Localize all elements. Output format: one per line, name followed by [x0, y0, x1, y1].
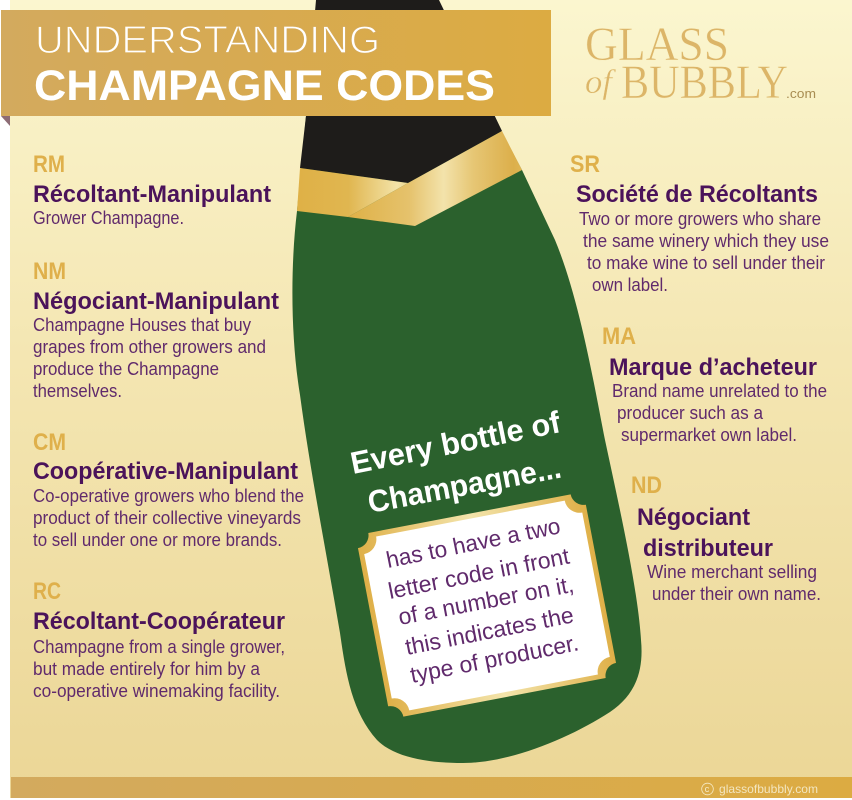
entry: NM: NM	[33, 258, 66, 285]
label frame	[356, 492, 618, 719]
entry: CM: product of their collective vineyards	[33, 508, 301, 528]
entry: SR: the same winery which they use	[583, 231, 829, 251]
copyright icon	[702, 783, 713, 795]
entry: SR: own label.	[592, 275, 668, 295]
bottle label	[356, 492, 618, 719]
entry: RC: but made entirely for him by a	[33, 659, 261, 679]
bottle body	[292, 110, 642, 763]
bottle heading: Every bottle of	[347, 404, 564, 481]
label text: type of producer.	[408, 629, 581, 688]
entry: MA: MA	[602, 323, 636, 350]
title banner	[1, 10, 551, 126]
champagne bottle	[292, 0, 642, 763]
entry: CM: Co-operative growers who blend the	[33, 486, 304, 506]
entry: SR: to make wine to sell under their	[587, 253, 825, 273]
entry: NM: themselves.	[33, 381, 122, 401]
entry: ND: under their own name.	[652, 584, 821, 604]
title line 2: CHAMPAGNE CODES	[34, 62, 495, 110]
entry: RC	[33, 578, 285, 701]
entry: RC: Champagne from a single grower,	[33, 637, 285, 657]
entry: SR	[570, 151, 829, 295]
entry: ND: Wine merchant selling	[647, 562, 817, 582]
entry: CM: to sell under one or more brands.	[33, 530, 282, 550]
label text: this indicates the	[403, 601, 576, 660]
entry: RM	[33, 151, 271, 228]
gold neck band	[297, 131, 522, 226]
entry: SR: SR	[570, 151, 600, 178]
entry: NM: Négociant-Manipulant	[33, 288, 279, 315]
entry: CM	[33, 429, 304, 550]
footer bar	[11, 777, 852, 798]
entry: RM: Récoltant-Manipulant	[33, 181, 271, 208]
black foil	[300, 0, 502, 183]
entry: SR: Société de Récoltants	[576, 181, 818, 208]
entry: MA: Brand name unrelated to the	[612, 381, 827, 401]
logo: Glass of Bubbly: .com	[786, 86, 816, 101]
entry: RC: co-operative winemaking facility.	[33, 681, 280, 701]
entry: MA: Marque d’acheteur	[609, 354, 817, 381]
entry: NM: Champagne Houses that buy	[33, 315, 251, 335]
entry: MA: producer such as a	[617, 403, 764, 423]
label text: has to have a two	[384, 512, 562, 573]
entry: RC: RC	[33, 578, 61, 605]
logo: Glass of Bubbly: BUBBLY	[621, 56, 788, 109]
entry: ND: Négociant	[637, 504, 750, 531]
entry: ND: distributeur	[643, 535, 773, 562]
logo: Glass of Bubbly: GLASS	[585, 18, 729, 71]
copyright icon: c	[705, 784, 710, 795]
entry: RM: Grower Champagne.	[33, 208, 184, 228]
title line 1: UNDERSTANDING	[35, 19, 380, 62]
entry: CM: CM	[33, 429, 66, 456]
label text: of a number on it,	[396, 571, 576, 630]
bottle heading	[347, 404, 564, 520]
entry: RM: RM	[33, 151, 65, 178]
entry: RC: Récoltant-Coopérateur	[33, 608, 285, 635]
entry: NM: produce the Champagne	[33, 359, 219, 379]
label text: letter code in front	[386, 543, 572, 604]
banner fold	[1, 116, 10, 126]
entry: NM: grapes from other growers and	[33, 337, 266, 357]
entry: MA	[602, 323, 827, 445]
logo: Glass of Bubbly: of	[585, 64, 617, 101]
entry: CM: Coopérative-Manipulant	[33, 458, 298, 485]
entry: ND: ND	[631, 472, 662, 499]
label text	[384, 512, 581, 688]
footer credit: glassofbubbly.com	[719, 782, 818, 796]
bottle heading: Champagne...	[365, 450, 564, 520]
entry: ND	[631, 472, 821, 604]
entry: NM	[33, 258, 279, 401]
entry: SR: Two or more growers who share	[579, 209, 821, 229]
entry: MA: supermarket own label.	[621, 425, 797, 445]
logo: Glass of Bubbly	[585, 18, 816, 109]
